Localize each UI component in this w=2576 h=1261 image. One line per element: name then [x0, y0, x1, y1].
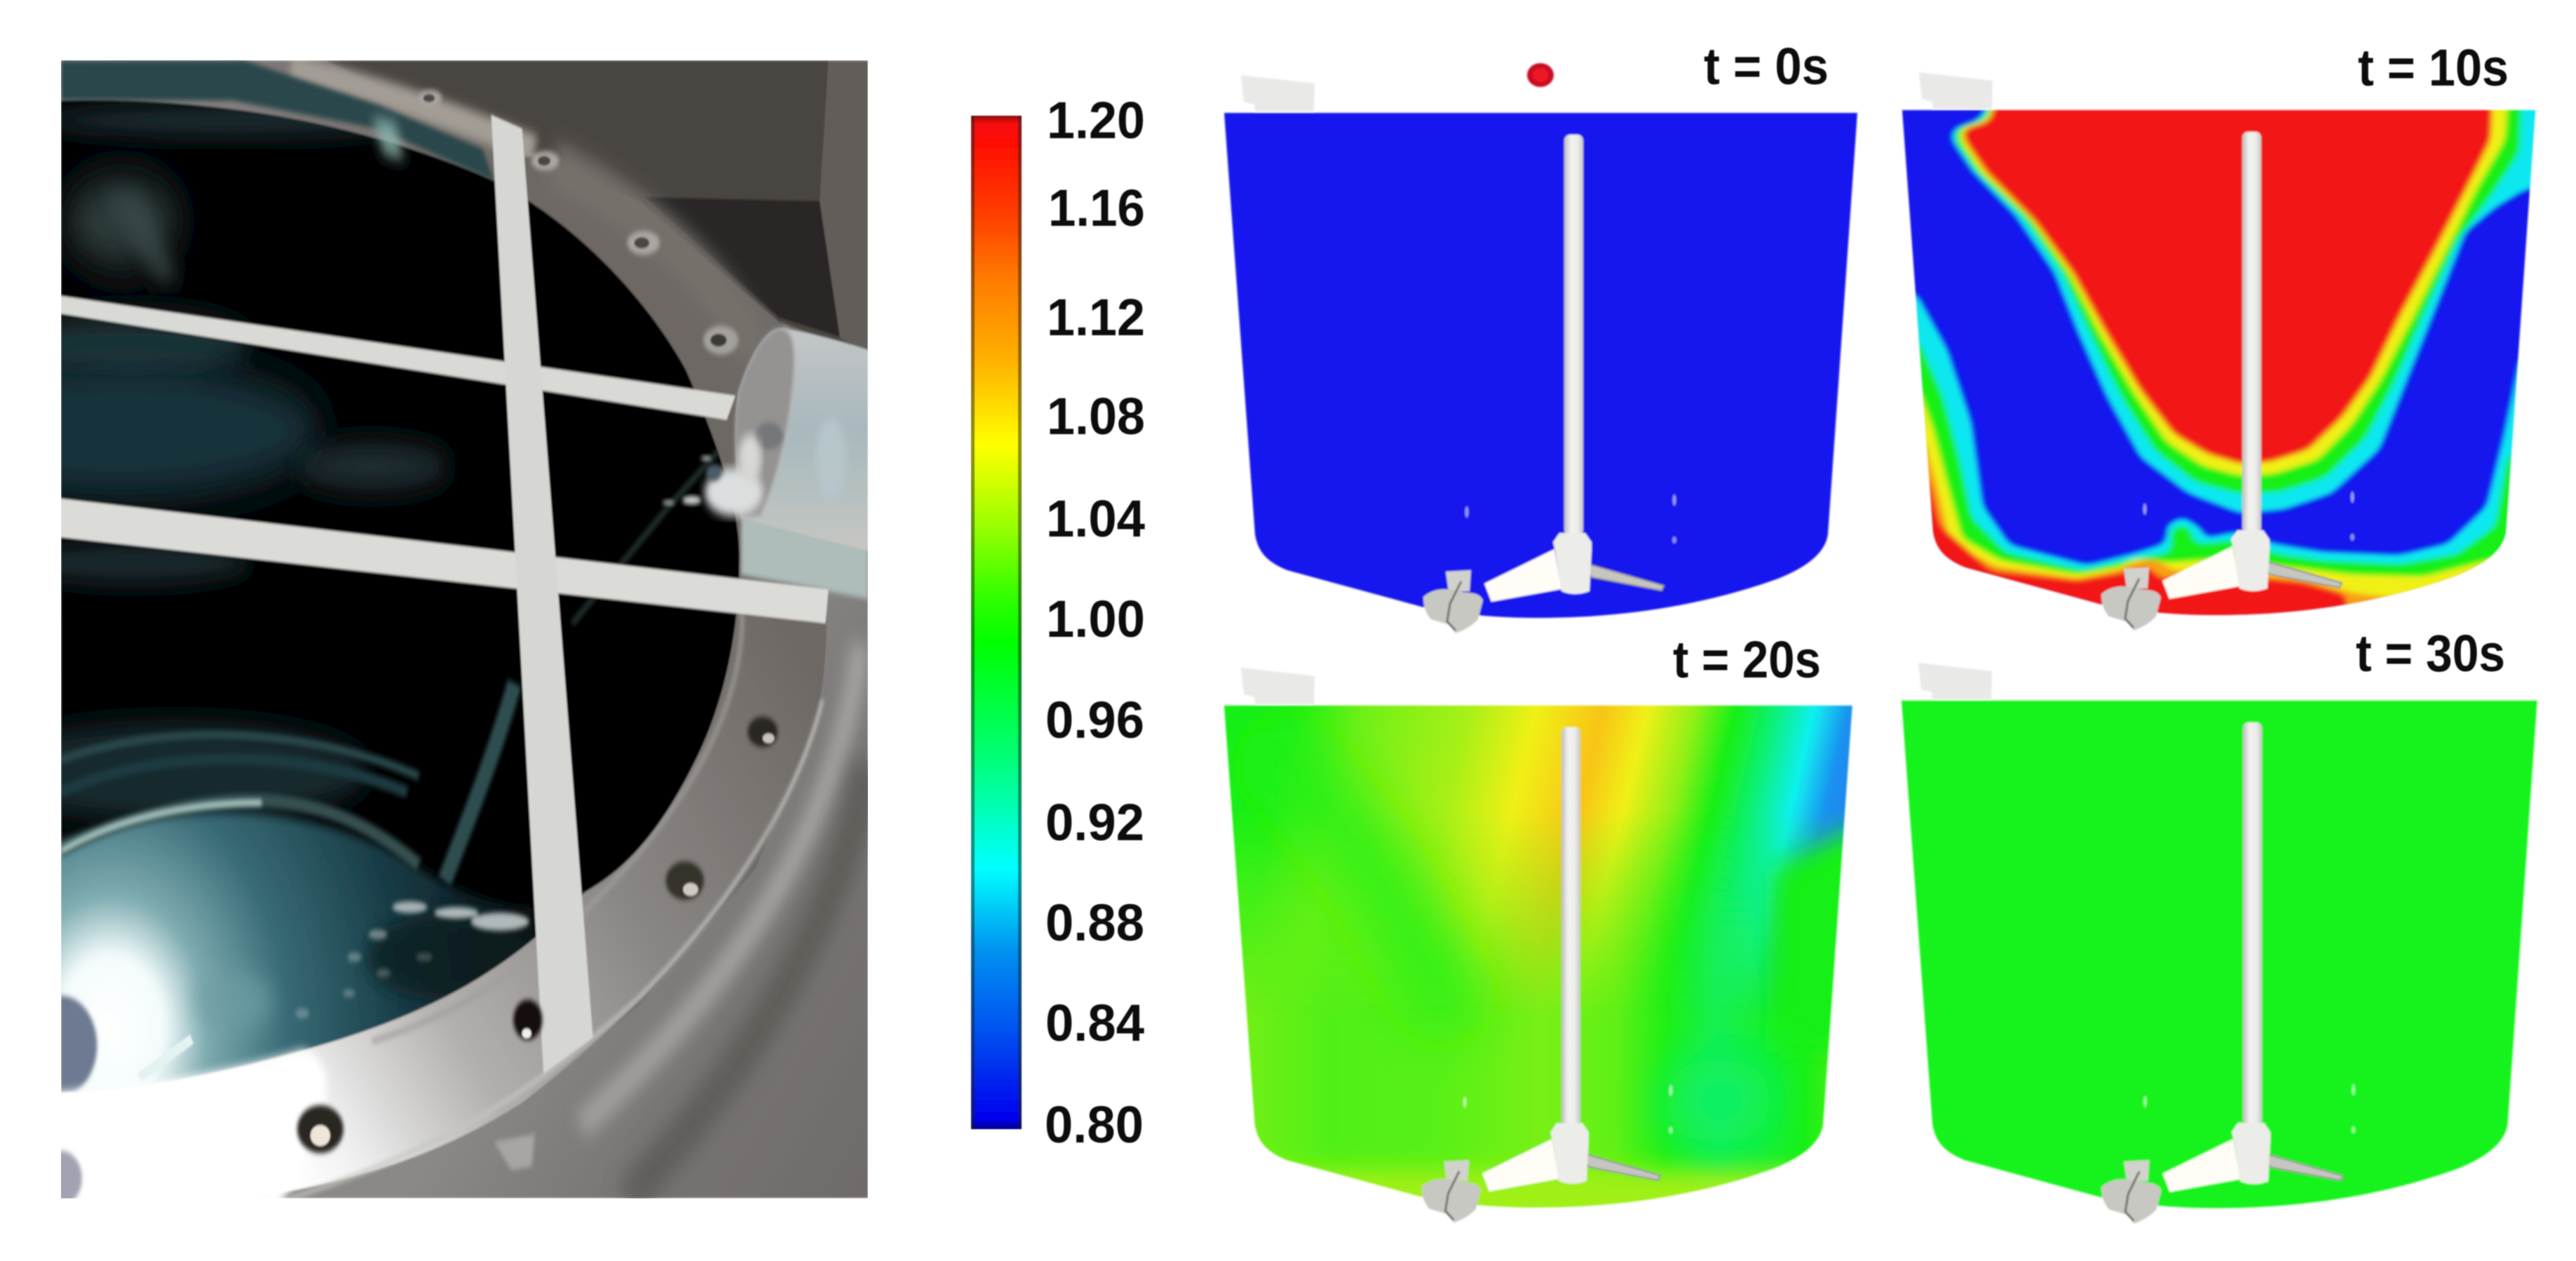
- colour bar tick labels: 0.96: [1045, 691, 1144, 749]
- bolt holes: [297, 90, 778, 1153]
- water surface speckle: [295, 901, 529, 1018]
- panel: t = 30s: [1902, 663, 2537, 1224]
- dark recess behind tank: [645, 197, 843, 338]
- lower wall layer: [1823, 292, 2576, 679]
- tracer drop: [1527, 63, 1554, 87]
- lower cup shadow area: [741, 515, 868, 599]
- panel: t = 20s: [1192, 668, 1893, 1241]
- label t = 10s: t = 10s: [2358, 39, 2509, 97]
- measuring cup: [663, 328, 868, 551]
- concentration field: [1823, 35, 2576, 679]
- colour bar tick labels: [1045, 91, 1145, 1154]
- lime bottom band: [1262, 1170, 1795, 1226]
- upper horizontal strip: [61, 296, 735, 420]
- back wall: [325, 60, 868, 354]
- colour bar tick labels: 1.00: [1046, 590, 1145, 648]
- baffle: [1919, 72, 1993, 109]
- overexposed lower-left glare: [35, 1049, 327, 1206]
- stirrer: [2101, 722, 2356, 1224]
- pouring stream: [445, 684, 515, 881]
- vertical strip: [492, 115, 593, 1074]
- label t = 0s: t = 0s: [1704, 37, 1829, 95]
- flange ring: [61, 60, 827, 1199]
- colour bar tick labels: 1.08: [1047, 387, 1145, 445]
- water spilling from the cup: [705, 468, 763, 516]
- stirrer: [2101, 132, 2354, 630]
- top reflection: [372, 116, 404, 161]
- colour bar tick labels: 1.16: [1048, 179, 1145, 237]
- label t = 30s: t = 30s: [2356, 624, 2505, 682]
- teal upper rim: [61, 60, 494, 181]
- baffle: [1241, 75, 1315, 112]
- colour bar tick labels: 1.20: [1047, 91, 1145, 149]
- colour bar tick labels: 0.92: [1045, 793, 1144, 851]
- lower teal patch: [1662, 1059, 1774, 1143]
- stirrer: [1422, 727, 1673, 1223]
- colour bar tick labels: 1.12: [1047, 288, 1145, 346]
- colour bar: [971, 116, 1022, 1129]
- colour bar tick labels: 0.80: [1045, 1095, 1144, 1154]
- colour bar tick labels: 1.04: [1046, 490, 1145, 548]
- panel: t = 10s: [1823, 35, 2576, 679]
- outer tank body: [283, 591, 868, 1199]
- illuminated bowl: [61, 809, 595, 1093]
- dark tank opening: [61, 99, 740, 1093]
- baffle: [1241, 668, 1315, 704]
- panel: t = 0s: [1224, 63, 1857, 633]
- dark water surface: [366, 913, 541, 1002]
- colour bar tick labels: 0.88: [1045, 894, 1144, 952]
- concentration field: [1192, 694, 1893, 1241]
- uniform concentration field: [1902, 701, 2537, 1208]
- label t = 20s: t = 20s: [1673, 630, 1821, 689]
- purple reflection spot: [40, 1151, 82, 1206]
- lower horizontal strip: [61, 499, 828, 623]
- central plume layers: [1951, 35, 2576, 514]
- right green patch: [1774, 824, 1865, 1052]
- stirrer: [1423, 135, 1676, 633]
- tank field: [1224, 113, 1857, 618]
- green diagonal ridge: [1290, 764, 1444, 996]
- right wall strip: [820, 60, 868, 354]
- photo: tracer being poured into the stirred tank: [0, 60, 868, 1206]
- colour bar tick labels: 0.84: [1045, 994, 1144, 1052]
- baffle: [1918, 663, 1992, 699]
